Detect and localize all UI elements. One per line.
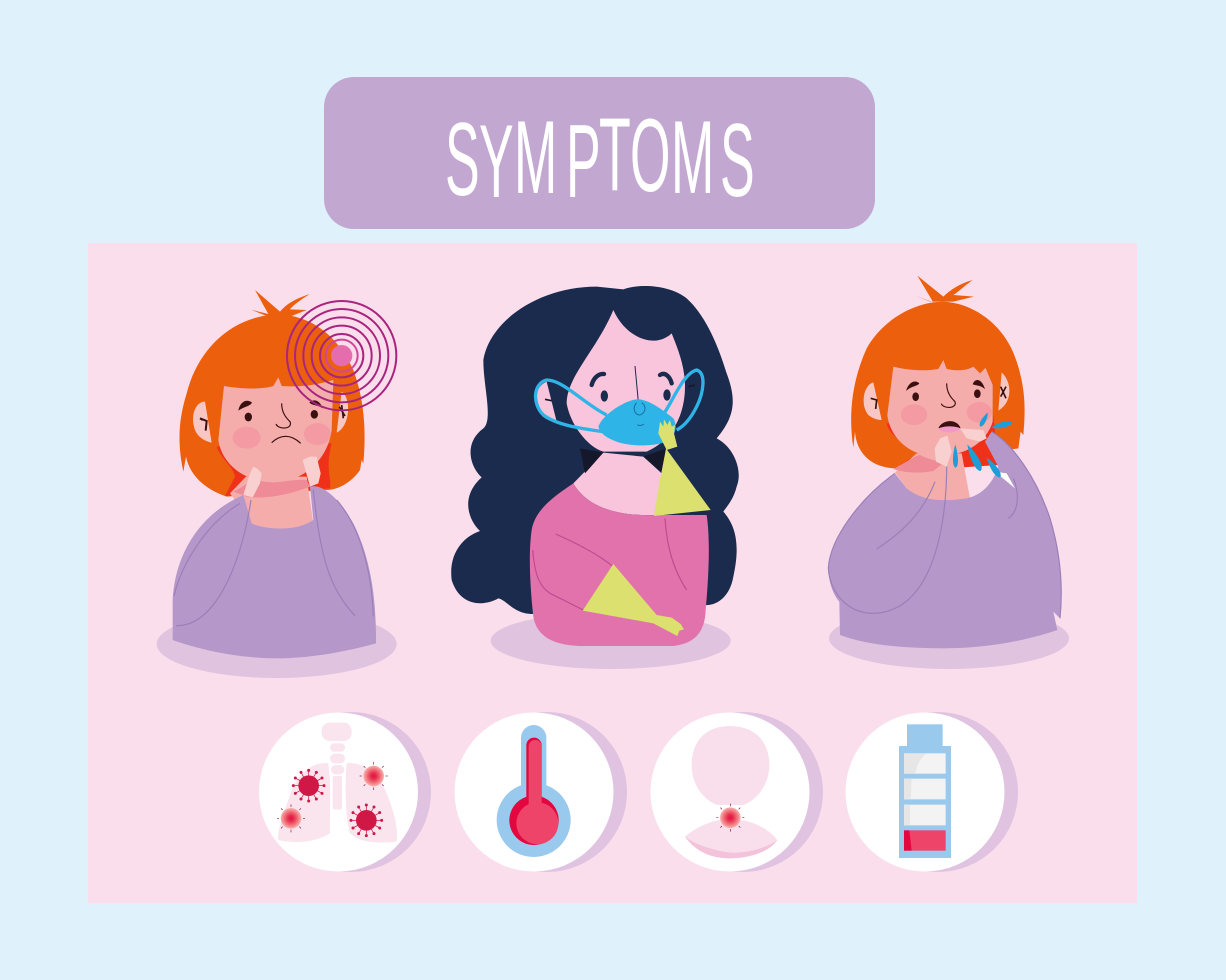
figure: woman with headache [157, 290, 397, 678]
icon: thermometer [454, 712, 627, 872]
icon: glove on arm [583, 564, 684, 636]
figure: woman wearing mask [451, 286, 739, 669]
title: SYMPTOMS: SYMPTOMS [445, 98, 755, 220]
icon: glove hand on mask [654, 419, 711, 516]
icon: face mask [536, 370, 703, 445]
figure: person coughing [828, 276, 1069, 669]
panel: symptoms [88, 243, 1137, 903]
icon: pain rings [287, 301, 396, 410]
icon: lungs with virus [259, 712, 431, 872]
title banner [324, 77, 875, 229]
icon: cough droplets [953, 412, 1012, 478]
icon: low battery [846, 712, 1018, 872]
icon: sore throat [650, 712, 823, 872]
icon row: symptoms [259, 712, 1018, 872]
